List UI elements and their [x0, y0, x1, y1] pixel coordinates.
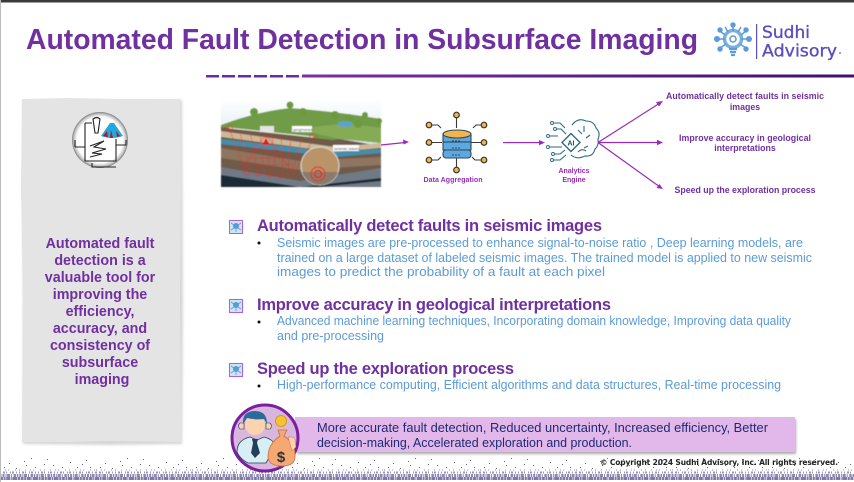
body text: Advanced machine learning techniques, Incorporating domain knowledge, Improving data quality	[277, 313, 792, 328]
title: Automated Fault Detection in Subsurface Imaging	[26, 24, 698, 56]
arrow: image to data aggregation	[381, 140, 409, 145]
body text: High-performance computing, Efficient algorithms and data structures, Real-time processing	[277, 377, 781, 392]
section 2	[230, 296, 792, 343]
outcomes text	[666, 91, 824, 195]
panel text: consistency of	[50, 338, 150, 354]
seismic survey illustration	[221, 99, 382, 187]
body text: Seismic images are pre-processed to enhance signal-to-noise ratio , Deep learning models, are	[277, 235, 803, 250]
panel text: accuracy, and	[53, 321, 147, 337]
hill	[221, 108, 381, 143]
footer noise band	[1, 458, 854, 482]
callout: benefits: decision-making, Accelerated exploration and production.	[317, 435, 632, 450]
label: Analytics	[558, 168, 590, 175]
panel text: improving the	[53, 287, 147, 303]
arrow: aggregation to engine	[503, 140, 545, 145]
section 1	[230, 217, 813, 279]
outcomes text: interpretations	[714, 143, 776, 153]
icon: advisor with money bag	[232, 405, 298, 471]
trees	[250, 102, 382, 128]
icon: analytics engine: AI	[568, 140, 575, 148]
panel text: detection is a	[54, 253, 147, 269]
label: Engine	[562, 177, 586, 184]
heading: Automatically detect faults in seismic images	[257, 217, 602, 235]
outcomes text: Improve accuracy in geological	[679, 133, 811, 143]
panel text: Automated fault	[46, 236, 155, 252]
icon: data aggregation	[424, 112, 487, 184]
section 3	[230, 360, 781, 392]
panel text: valuable tool for	[45, 270, 156, 286]
heading: Improve accuracy in geological interpretations	[257, 296, 611, 314]
icon: bullet	[230, 364, 242, 376]
outcomes text: Speed up the exploration process	[674, 185, 816, 195]
heading: Speed up the exploration process	[257, 360, 514, 378]
lens	[301, 147, 339, 185]
body text: images to predict the probability of a fault at each pixel	[277, 264, 605, 279]
copyright: © Copyright 2024 Sudhi Advisory, Inc. All rights reserved.	[600, 458, 838, 467]
callout: benefits: More accurate fault detection, Reduced uncertainty, Increased efficiency, Better	[317, 420, 769, 435]
seismic survey illustration: seismic waves	[334, 146, 360, 151]
icon: advisor with money bag: $	[277, 449, 286, 466]
panel: summary	[21, 98, 183, 445]
seismic survey illustration: geophones	[293, 127, 313, 132]
body text: trained on a large dataset of labeled seismic images. The trained model is applied to new seismic	[277, 250, 813, 265]
label: Data Aggregation	[424, 177, 482, 184]
icon: seismic report badge	[72, 112, 128, 168]
soil	[221, 127, 381, 187]
arrows: engine to outcomes	[598, 101, 663, 189]
panel text: efficiency,	[66, 304, 134, 320]
logo: Sudhi Advisory	[714, 22, 841, 62]
callout: benefits	[295, 417, 796, 454]
icon: analytics engine	[546, 120, 599, 184]
outcomes text: Automatically detect faults in seismic	[666, 91, 824, 101]
logo: Sudhi Advisory: Sudhi	[762, 23, 810, 43]
panel text: imaging	[75, 372, 129, 388]
body text	[277, 235, 813, 279]
icon: light bulb network	[714, 22, 752, 55]
body text: and pre-processing	[277, 328, 384, 343]
title rule	[206, 74, 854, 78]
icon: bullet	[230, 300, 242, 312]
outcomes text: images	[730, 102, 760, 112]
body text	[277, 313, 792, 343]
logo: Sudhi Advisory: Advisory	[762, 42, 837, 62]
icon: bullet	[230, 220, 242, 234]
panel text: subsurface	[62, 355, 138, 371]
